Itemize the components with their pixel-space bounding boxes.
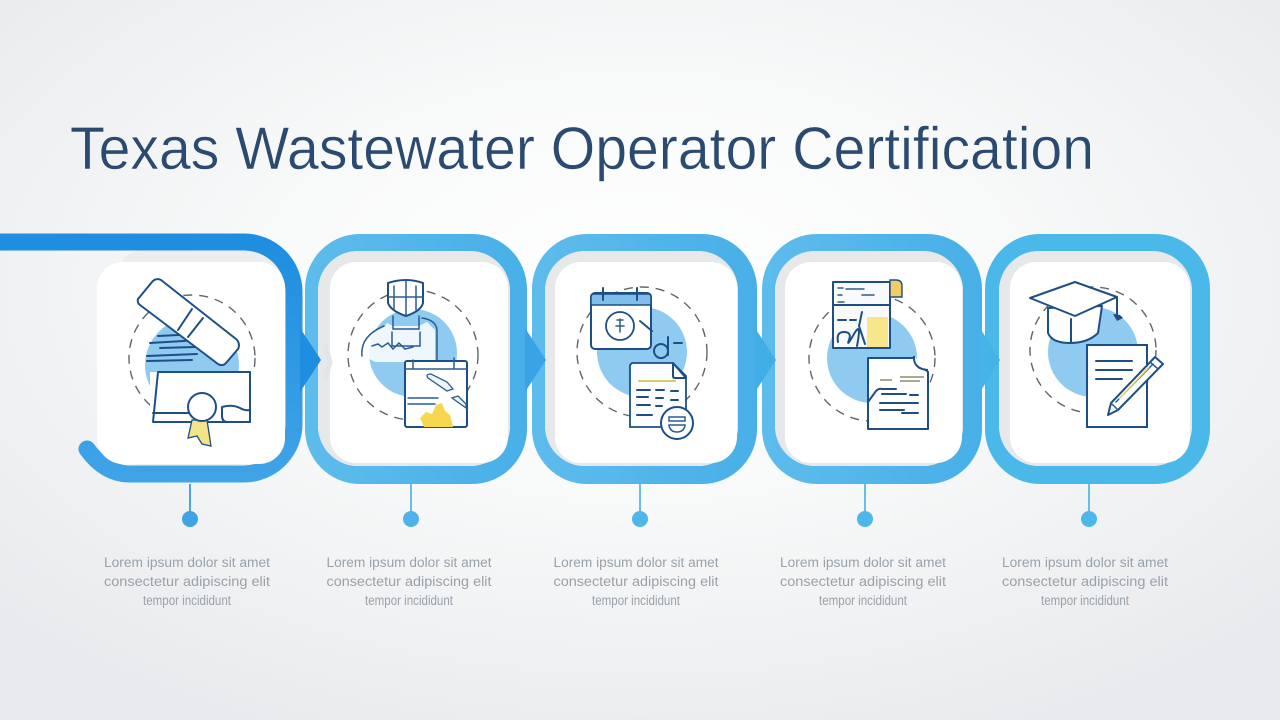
title: Texas Wastewater Operator Certification — [70, 115, 1094, 182]
caption 1 — [104, 555, 270, 608]
caption 4: tempor incididunt — [819, 593, 907, 608]
caption 3: Lorem ipsum dolor sit amet — [554, 555, 719, 570]
caption 1: Lorem ipsum dolor sit amet — [104, 555, 270, 570]
step 1 frame — [0, 242, 294, 474]
arrow 3 — [755, 328, 776, 392]
caption 1: consectetur adipiscing elit — [104, 574, 270, 589]
caption 4: consectetur adipiscing elit — [780, 574, 946, 589]
caption 3 — [554, 555, 719, 608]
caption 4: Lorem ipsum dolor sit amet — [780, 555, 946, 570]
connector 1 — [182, 484, 198, 527]
arrow 4 — [980, 328, 1000, 392]
step 4 panel: two documents — [762, 234, 982, 484]
step 3 icon — [577, 287, 707, 439]
caption 5: Lorem ipsum dolor sit amet — [1002, 555, 1168, 570]
step 2 card — [330, 262, 508, 463]
caption 3: consectetur adipiscing elit — [554, 574, 719, 589]
connector 4 — [857, 484, 873, 527]
step 3 card — [555, 262, 737, 463]
step 2 icon — [348, 280, 478, 427]
step 1 icon — [129, 279, 262, 446]
caption 2: Lorem ipsum dolor sit amet — [326, 555, 492, 570]
connector 3 — [632, 484, 648, 527]
caption 2 — [326, 555, 492, 608]
caption 3: tempor incididunt — [592, 593, 680, 608]
step 3 frame — [532, 234, 757, 484]
step 2 frame — [305, 234, 527, 484]
step 1 panel: bandage and certificate — [0, 242, 294, 474]
step 4 frame — [762, 234, 982, 484]
caption 4 — [780, 555, 946, 608]
caption 1: tempor incididunt — [143, 593, 231, 608]
step 5 icon — [1030, 282, 1163, 427]
step 2 panel: shield and calendar — [305, 234, 527, 484]
caption 5 — [1002, 555, 1168, 608]
arrows between steps — [300, 328, 1000, 392]
caption 5: tempor incididunt — [1041, 593, 1129, 608]
connector 2 — [403, 484, 419, 527]
step 4 card — [785, 262, 962, 463]
connector 5 — [1081, 484, 1097, 527]
caption 5: consectetur adipiscing elit — [1002, 574, 1168, 589]
caption 2: consectetur adipiscing elit — [326, 574, 492, 589]
step 5 panel: graduation cap and paper — [985, 234, 1210, 484]
step 3 panel: calendar and document — [532, 234, 757, 484]
step 5 frame — [985, 234, 1210, 484]
caption 2: tempor incididunt — [365, 593, 453, 608]
arrow 1 — [300, 328, 321, 392]
step 1 card — [97, 262, 285, 464]
step 5 card — [1010, 262, 1190, 463]
step 4 icon — [809, 280, 935, 429]
arrow 2 — [525, 328, 546, 392]
